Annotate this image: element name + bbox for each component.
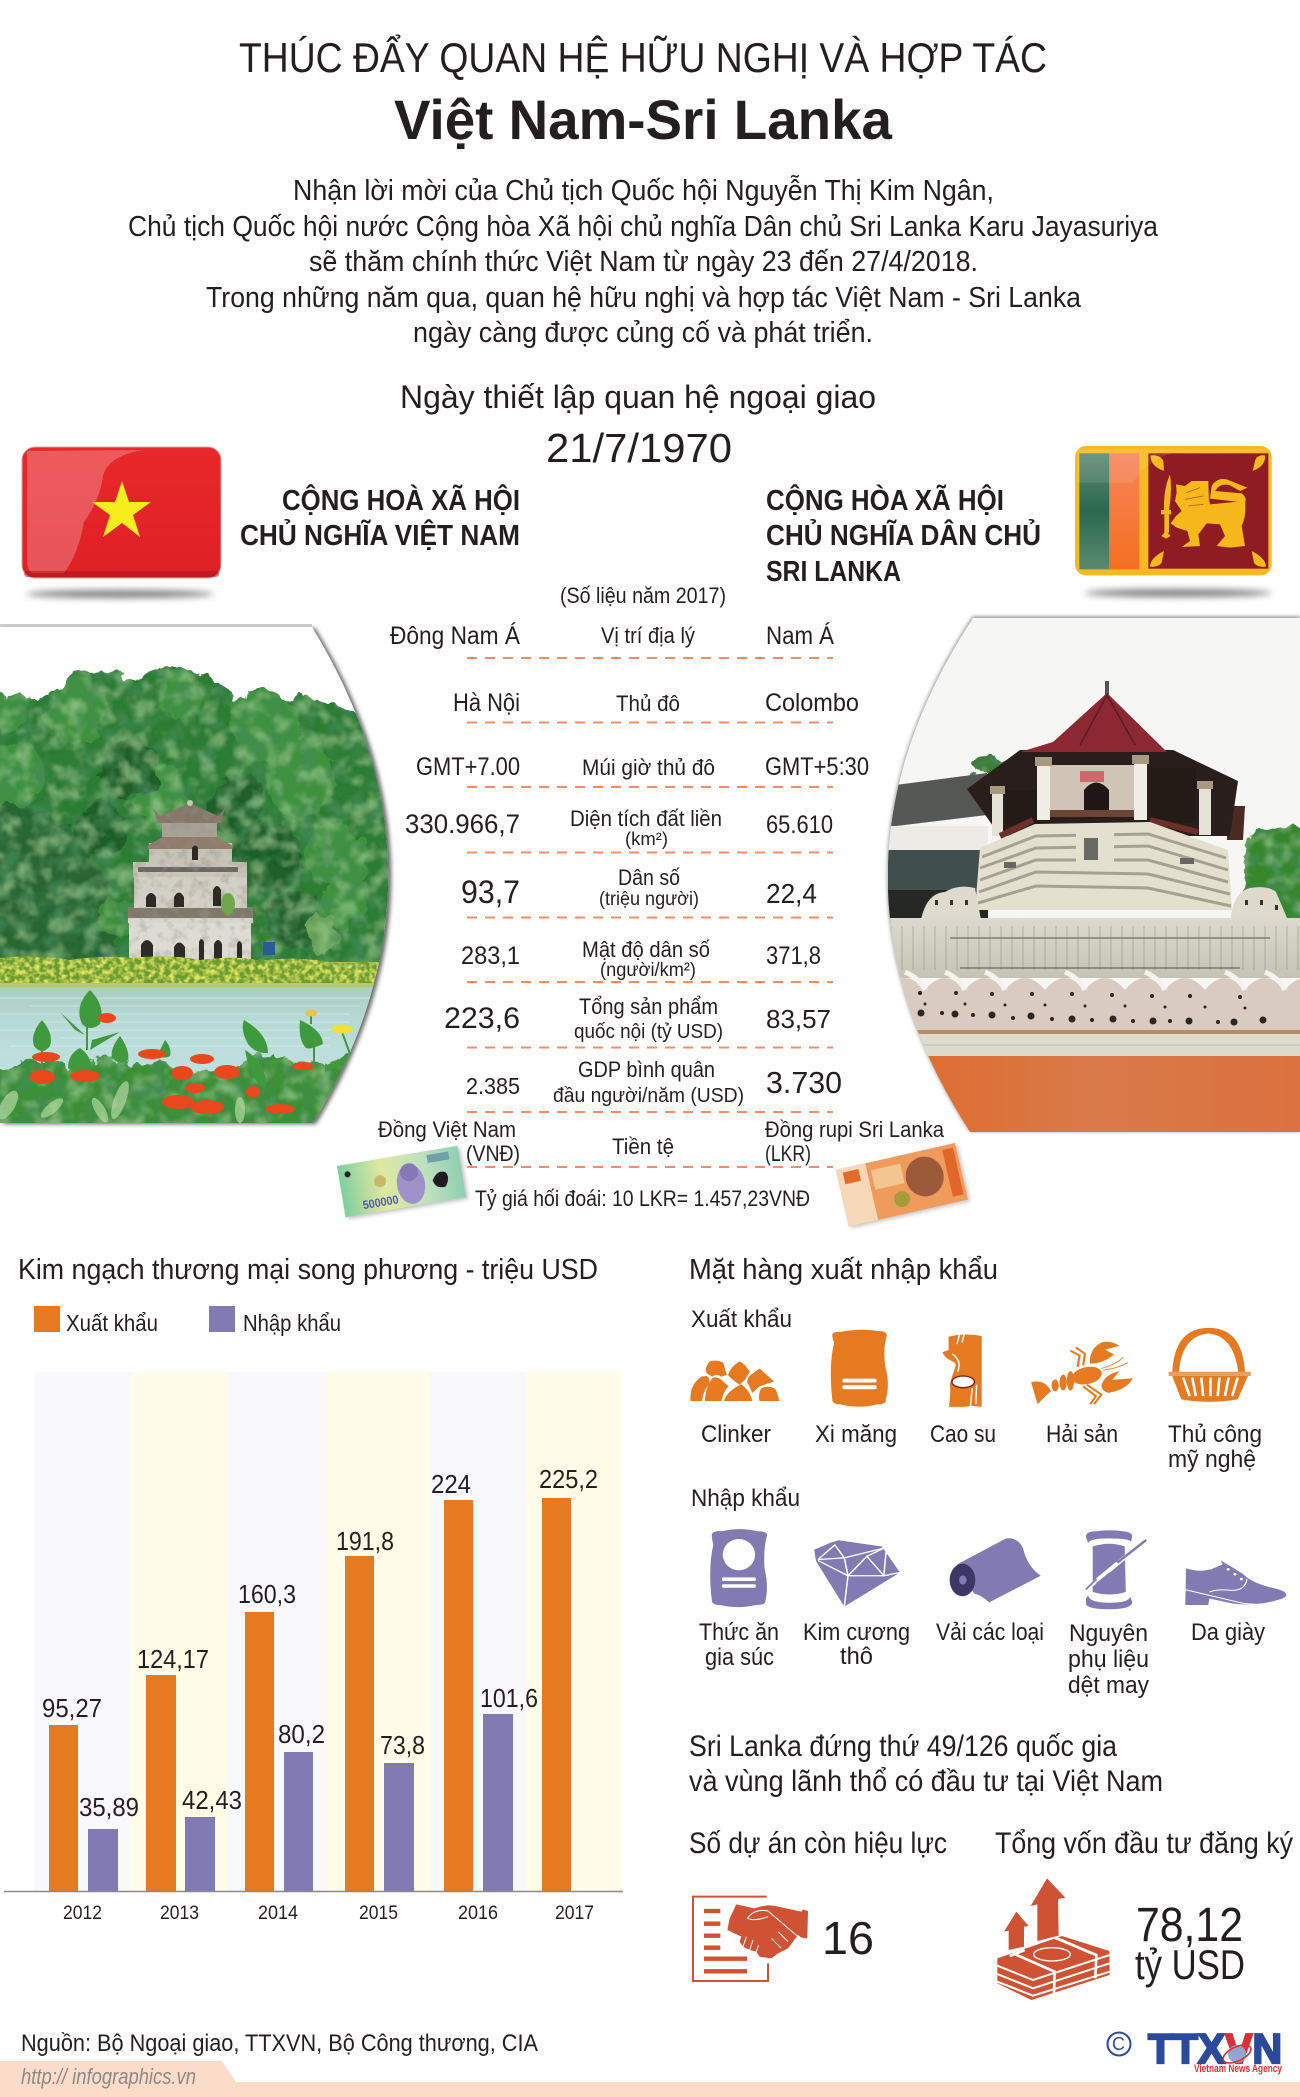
label: leather footwear: Da giày xyxy=(1191,1619,1265,1646)
icon: handshake contract xyxy=(693,1897,808,1981)
import subheading: Nhập khẩu xyxy=(691,1485,800,1512)
row: GDP per capita xyxy=(466,1057,842,1107)
label: textile materials xyxy=(1068,1620,1149,1699)
icon: diamond xyxy=(814,1540,900,1607)
panel: bilateral trade chart xyxy=(4,1254,623,1924)
label: textile materials: dệt may xyxy=(1068,1672,1149,1699)
label: handicrafts: mỹ nghệ xyxy=(1168,1446,1256,1473)
year labels: 2014 xyxy=(258,1903,298,1924)
row: land area: (km²) xyxy=(625,829,668,849)
intro paragraph: ngày càng được củng cố và phát triển. xyxy=(413,317,873,349)
row: location: Đông Nam Á xyxy=(390,621,520,650)
title xyxy=(239,33,1047,151)
value labels: 95,27 xyxy=(42,1693,102,1723)
row: population: 22,4 xyxy=(766,878,817,909)
value labels: 35,89 xyxy=(79,1792,139,1822)
row: currency: Tiền tệ xyxy=(612,1134,674,1159)
icon: Vietnam flag xyxy=(22,447,221,598)
icon: fabric roll xyxy=(950,1538,1041,1602)
logo: TTXVN: TTXVN xyxy=(1148,2025,1282,2072)
row: currency: Đồng rupi Sri Lanka xyxy=(765,1117,945,1142)
investment heading xyxy=(689,1730,1163,1798)
fence xyxy=(885,978,1300,1032)
title: THÚC ĐẨY QUAN HỆ HỮU NGHỊ VÀ HỢP TÁC xyxy=(239,33,1047,81)
label: rough diamonds: thô xyxy=(840,1643,873,1670)
wall xyxy=(921,886,1287,918)
chart bands xyxy=(34,1372,621,1891)
source note: Nguồn: Bộ Ngoại giao, TTXVN, Bộ Công thương, CIA xyxy=(21,2030,538,2057)
value labels: 124,17 xyxy=(137,1644,209,1674)
label: rough diamonds xyxy=(803,1619,910,1670)
investment heading: Sri Lanka đứng thứ 49/126 quốc gia xyxy=(689,1730,1117,1763)
row: GDP: 223,6 xyxy=(444,1002,520,1035)
goods heading: Mặt hàng xuất nhập khẩu xyxy=(689,1254,998,1286)
row: GDP: 83,57 xyxy=(766,1004,831,1034)
legend xyxy=(34,1306,341,1336)
stepped base xyxy=(975,822,1232,910)
icon: cement bag xyxy=(831,1330,888,1407)
icon: Sri Lanka flag xyxy=(1075,446,1273,597)
stat: registered capital xyxy=(1135,1899,1245,1988)
chart title: Kim ngạch thương mại song phương - triệu USD xyxy=(18,1254,598,1286)
icon: clinker xyxy=(690,1361,780,1401)
icon: shoe xyxy=(1185,1560,1287,1605)
icon: basket xyxy=(1169,1328,1251,1402)
row: currency: Đồng Việt Nam xyxy=(378,1117,516,1142)
comparison table xyxy=(378,621,945,1211)
logo: TTXVN: C xyxy=(1112,2034,1125,2054)
headings: country names: CHỦ NGHĨA DÂN CHỦ xyxy=(766,518,1041,552)
diplomatic relations date: 21/7/1970 xyxy=(546,425,732,471)
label: textile materials: phụ liệu xyxy=(1068,1646,1149,1673)
icon: Vietnamese banknote: 500000 xyxy=(362,1192,400,1212)
intro paragraph: Chủ tịch Quốc hội nước Cộng hòa Xã hội chủ nghĩa Dân chủ Sri Lanka Karu Jayasuriya xyxy=(128,211,1159,243)
projects label: Số dự án còn hiệu lực xyxy=(689,1827,947,1860)
row: time zone: GMT+5:30 xyxy=(765,753,869,781)
stat: registered capital: 78,12 xyxy=(1136,1899,1243,1952)
label: rubber: Cao su xyxy=(930,1421,996,1448)
row: capital: Thủ đô xyxy=(616,691,680,716)
row: GDP per capita: 3.730 xyxy=(766,1065,842,1100)
year labels: 2012 xyxy=(63,1903,102,1924)
export subheading: Xuất khẩu xyxy=(691,1306,792,1333)
intro paragraph: sẽ thăm chính thức Việt Nam từ ngày 23 đến 27/4/2018. xyxy=(309,246,978,278)
row: land area: 330.966,7 xyxy=(405,809,520,839)
panel: investment xyxy=(689,1730,1293,2000)
value labels xyxy=(42,1464,598,1822)
label: handicrafts xyxy=(1168,1421,1262,1473)
investment heading: và vùng lãnh thổ có đầu tư tại Việt Nam xyxy=(689,1765,1163,1798)
row: population: (triệu người) xyxy=(599,889,699,910)
row: population: Dân số xyxy=(618,865,680,890)
diplomatic relations date: Ngày thiết lập quan hệ ngoại giao xyxy=(400,379,876,415)
label: animal feed: Thức ăn xyxy=(699,1619,779,1646)
photo: Turtle Tower, Hanoi xyxy=(0,624,394,1128)
icon: spool and needle xyxy=(1086,1530,1147,1609)
row: density: (người/km²) xyxy=(600,960,696,981)
label: cement: Xi măng xyxy=(815,1421,897,1448)
value labels: 160,3 xyxy=(238,1579,296,1609)
stat: projects: 16 xyxy=(822,1912,874,1964)
row: population: 93,7 xyxy=(461,874,520,910)
year labels xyxy=(63,1903,594,1924)
label: handicrafts: Thủ công xyxy=(1168,1421,1262,1448)
row: GDP: Tổng sản phẩm xyxy=(579,994,718,1019)
row: density: Mật độ dân số xyxy=(582,937,710,962)
row: GDP per capita: GDP bình quân xyxy=(578,1057,715,1082)
icon: money stack with arrows xyxy=(997,1878,1110,2000)
year labels: 2013 xyxy=(160,1903,199,1924)
row: GDP xyxy=(444,994,831,1043)
row: time zone: Múi giờ thủ đô xyxy=(582,755,715,780)
headings: country names xyxy=(240,483,1041,588)
flowers xyxy=(0,990,353,1123)
value labels: 42,43 xyxy=(182,1785,242,1815)
diplomatic relations date xyxy=(400,379,876,471)
legend: Nhập khẩu xyxy=(243,1310,341,1336)
label: textile materials: Nguyên xyxy=(1069,1620,1148,1647)
year labels: 2016 xyxy=(458,1903,498,1924)
headings: country names: CHỦ NGHĨA VIỆT NAM xyxy=(240,518,520,552)
row: land area: Diện tích đất liền xyxy=(570,806,722,831)
icon: Vietnamese banknote xyxy=(337,1146,468,1219)
intro paragraph: Trong những năm qua, quan hệ hữu nghị và hợp tác Việt Nam - Sri Lanka xyxy=(206,282,1082,314)
exchange rate: Tỷ giá hối đoái: 10 LKR= 1.457,23VNĐ xyxy=(475,1186,810,1211)
legend: Xuất khẩu xyxy=(66,1310,158,1336)
row: currency: (VNĐ) xyxy=(466,1141,520,1166)
row: GDP per capita: đầu người/năm (USD) xyxy=(553,1085,744,1107)
icon: lobster xyxy=(1031,1342,1133,1404)
label: fabrics: Vải các loại xyxy=(936,1619,1044,1646)
icon: Sri Lankan banknote xyxy=(836,1143,970,1229)
icon: rubber tree xyxy=(942,1334,982,1407)
intro paragraph: Nhận lời mời của Chủ tịch Quốc hội Nguyễn Thị Kim Ngân, xyxy=(293,174,994,207)
row: GDP: quốc nội (tỷ USD) xyxy=(574,1021,723,1043)
row: time zone xyxy=(416,753,869,781)
data year note: (Số liệu năm 2017) xyxy=(560,583,726,608)
headings: country names: SRI LANKA xyxy=(766,556,901,588)
row: time zone: GMT+7.00 xyxy=(416,753,520,781)
row: location xyxy=(390,621,834,650)
row: capital: Hà Nội xyxy=(453,689,520,717)
year labels: 2015 xyxy=(359,1903,398,1924)
label: animal feed: gia súc xyxy=(705,1644,774,1671)
value labels: 224 xyxy=(431,1469,471,1499)
row: GDP per capita: 2.385 xyxy=(466,1073,520,1099)
row: population xyxy=(461,865,817,910)
photo: Temple of the Tooth, Kandy xyxy=(880,617,1300,1138)
row: density xyxy=(461,937,821,981)
label: seafood: Hải sản xyxy=(1046,1421,1118,1448)
temple roof xyxy=(967,681,1245,840)
stat: registered capital: tỷ USD xyxy=(1135,1941,1245,1988)
label: clinker: Clinker xyxy=(701,1421,771,1448)
value labels: 80,2 xyxy=(278,1719,325,1749)
value labels: 225,2 xyxy=(539,1464,598,1494)
tower xyxy=(128,803,253,962)
value labels: 191,8 xyxy=(336,1526,394,1556)
label: animal feed xyxy=(699,1619,779,1671)
import bars xyxy=(88,1714,513,1891)
value labels: 73,8 xyxy=(380,1730,425,1760)
row: currency: (LKR) xyxy=(765,1141,811,1166)
headings: country names: CỘNG HOÀ XÃ HỘI xyxy=(282,483,520,517)
value labels: 101,6 xyxy=(480,1683,538,1713)
row: location: Vị trí địa lý xyxy=(601,623,695,648)
icon: feed bag xyxy=(710,1529,767,1607)
row: land area: 65.610 xyxy=(766,811,833,839)
row: density: 283,1 xyxy=(461,942,520,970)
footer band xyxy=(0,2061,1300,2097)
footer band: http:// infographics.vn xyxy=(21,2064,196,2089)
panel: import-export goods xyxy=(689,1254,1287,1699)
row: density: 371,8 xyxy=(766,942,821,970)
row: location: Nam Á xyxy=(766,621,834,650)
headings: country names: CỘNG HÒA XÃ HỘI xyxy=(766,483,1004,517)
row: capital: Colombo xyxy=(765,689,859,717)
label: rough diamonds: Kim cương xyxy=(803,1619,910,1646)
year labels: 2017 xyxy=(555,1903,594,1924)
export bars xyxy=(49,1498,571,1891)
intro paragraph xyxy=(128,174,1159,349)
row: capital xyxy=(453,689,859,717)
row: currency xyxy=(378,1117,945,1166)
title: Việt Nam-Sri Lanka xyxy=(394,88,893,151)
row: land area xyxy=(405,806,833,849)
